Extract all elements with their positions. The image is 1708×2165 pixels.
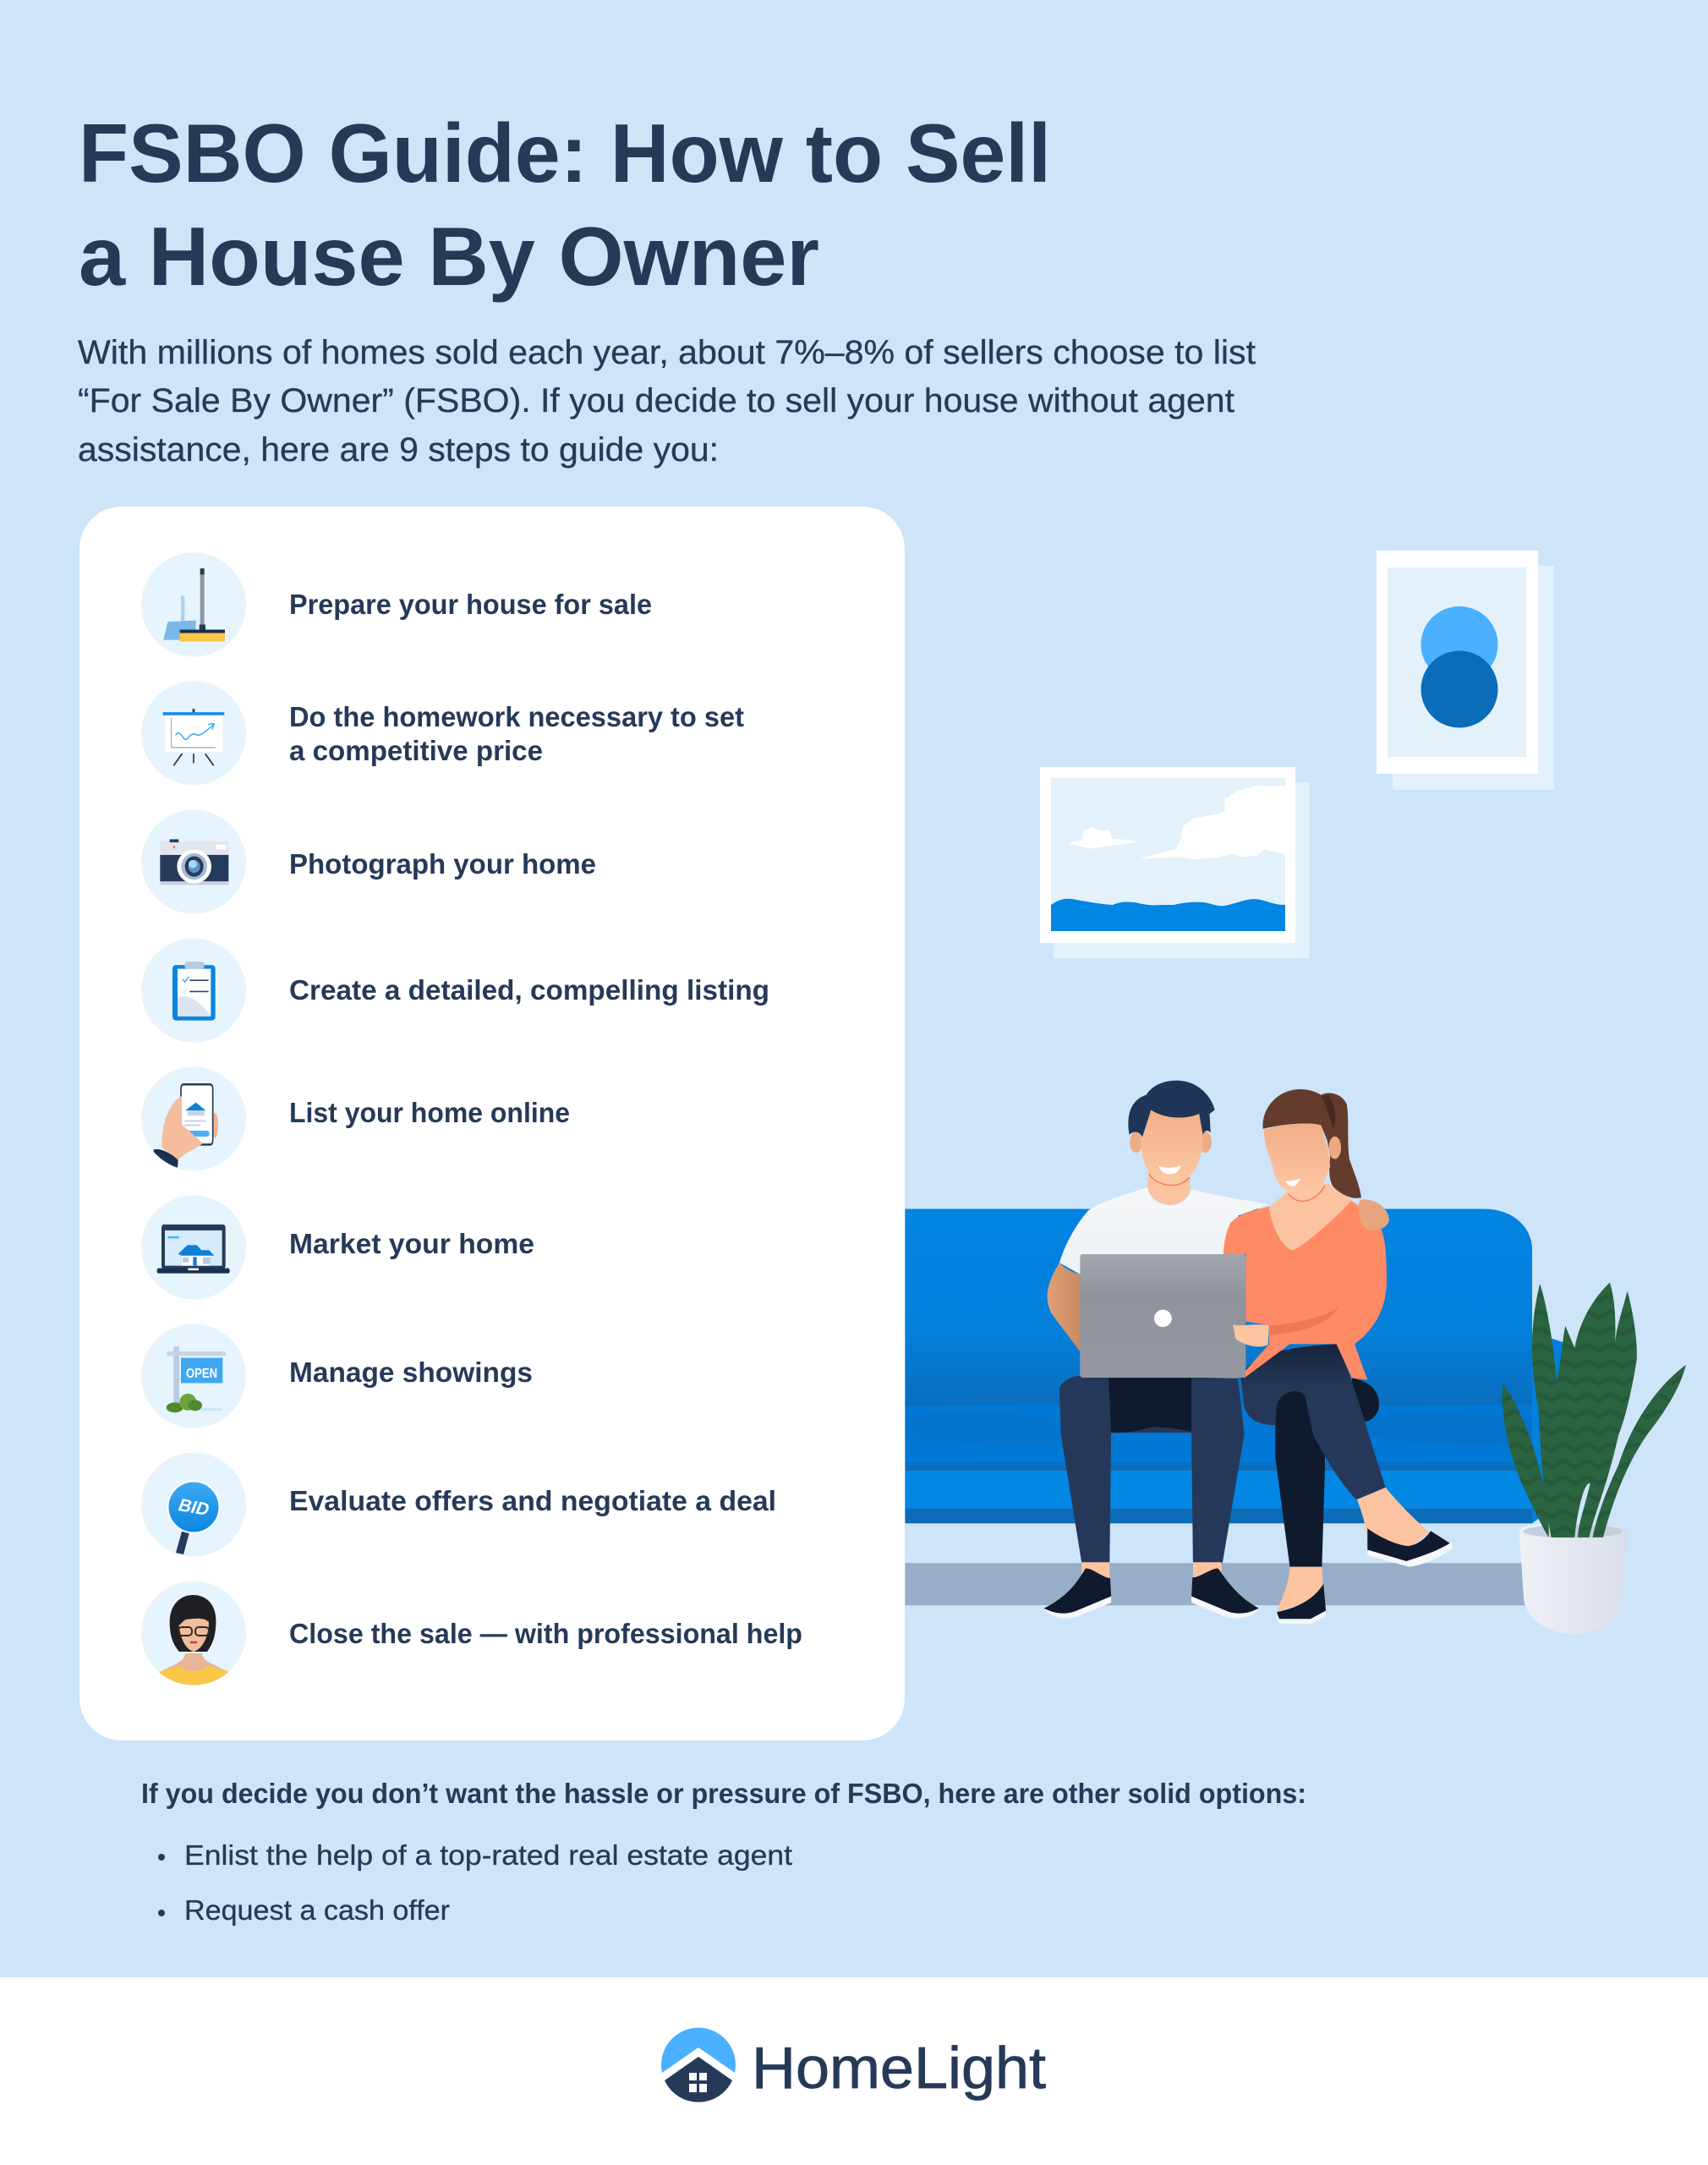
bullet 1: Enlist the help of a top-rated real estate agent: [184, 1839, 792, 1871]
man's hand on shoulder: [1359, 1199, 1389, 1230]
agent shoulders skin: [158, 1653, 230, 1687]
plant pot back: [1519, 1523, 1628, 1634]
step 7 text: Manage showings: [289, 1357, 533, 1388]
woman's neck: [1269, 1184, 1352, 1251]
step 7 icon: open house sign: OPEN: [186, 1367, 217, 1381]
agent hair: [170, 1595, 216, 1652]
man: [1044, 1081, 1269, 1619]
man's smile: [1158, 1165, 1181, 1174]
step 9 text: Close the sale — with professional help: [289, 1618, 802, 1649]
title: a House By Owner: [79, 210, 819, 303]
man's neck and head: [1147, 1170, 1191, 1205]
agent lips: [190, 1642, 197, 1643]
man's arm: [1048, 1263, 1080, 1351]
intro text: [78, 334, 1256, 469]
intro text: “For Sale By Owner” (FSBO). If you decide to sell your house without agent: [78, 382, 1234, 419]
intro text: assistance, here are 9 steps to guide you:: [78, 431, 719, 469]
step 2 text: Do the homework necessary to set: [289, 701, 744, 732]
agent top: [159, 1666, 228, 1685]
woman's planted foot: [1277, 1567, 1323, 1612]
water: [1051, 899, 1285, 931]
woman's sweater: [1224, 1200, 1387, 1380]
step 1 text: Prepare your house for sale: [289, 589, 652, 620]
wall art: landscape picture: [1040, 767, 1310, 958]
step 3 text: Photograph your home: [289, 848, 596, 880]
step 5 icon: hand holding phone: [141, 1067, 246, 1170]
logo wordmark: HomeLight: [752, 2035, 1046, 2101]
bottom options text: [141, 1778, 1306, 1926]
step 2 icon: presentation board: [141, 682, 246, 785]
agent glasses: [178, 1627, 209, 1636]
laptop: [1080, 1254, 1245, 1378]
woman's lifted foot: [1357, 1488, 1430, 1548]
step 8 icon: bid paddle: [141, 1453, 246, 1556]
step 8 icon: bid paddle: BID: [177, 1495, 211, 1520]
woman's hand: [1233, 1324, 1269, 1346]
woman's face: [1264, 1124, 1330, 1196]
step 9 icon: agent portrait: [141, 1581, 246, 1687]
title: [79, 107, 1051, 303]
woman's hair: [1262, 1089, 1361, 1198]
agent face: [178, 1619, 209, 1652]
step 2 text: [289, 701, 744, 766]
step 4 text: Create a detailed, compelling listing: [289, 974, 769, 1006]
small cloud: [1070, 828, 1137, 848]
logo mark: [661, 2028, 736, 2102]
intro text: With millions of homes sold each year, about 7%–8% of sellers choose to list: [78, 334, 1256, 371]
large cloud: [1141, 786, 1285, 859]
step 6 icon: laptop with house: [141, 1196, 246, 1299]
woman's seat and far leg: [1352, 1378, 1379, 1422]
step 4 icon: clipboard: [141, 939, 246, 1042]
footer: [0, 1977, 1708, 2165]
step 2 text: a competitive price: [289, 735, 543, 766]
step 1 icon: broom and dustpan: [141, 553, 246, 656]
woman: [1224, 1089, 1453, 1624]
man's trousers: [1059, 1376, 1245, 1563]
bullet 2: Request a cash offer: [184, 1894, 450, 1926]
sweater fold: [1269, 1307, 1339, 1335]
woman's crossed leg: [1240, 1344, 1386, 1499]
man's shirt: [1059, 1187, 1269, 1378]
step 3 icon: camera: [141, 810, 246, 913]
panel: steps: [79, 507, 905, 1740]
step 6 text: Market your home: [289, 1228, 534, 1259]
man's ears: [1130, 1132, 1142, 1153]
man's hair: [1128, 1081, 1215, 1137]
bottom options text: If you decide you don’t want the hassle or pressure of FSBO, here are other solid options:: [141, 1778, 1306, 1809]
floor rug: [905, 1563, 1526, 1605]
man's ankles and shoes: [1081, 1562, 1222, 1581]
sofa: [905, 1209, 1601, 1523]
snake plant: [1503, 1283, 1686, 1537]
title: FSBO Guide: How to Sell: [79, 107, 1051, 200]
step 7 icon: open house sign: [141, 1324, 246, 1428]
illustration: couple on sofa (drawn in scaled coordinates): [905, 1081, 1686, 1634]
step 8 text: Evaluate offers and negotiate a deal: [289, 1485, 776, 1516]
woman's smile: [1286, 1178, 1300, 1187]
step 5 text: List your home online: [289, 1097, 570, 1128]
wall art: circles picture: [1377, 551, 1554, 790]
